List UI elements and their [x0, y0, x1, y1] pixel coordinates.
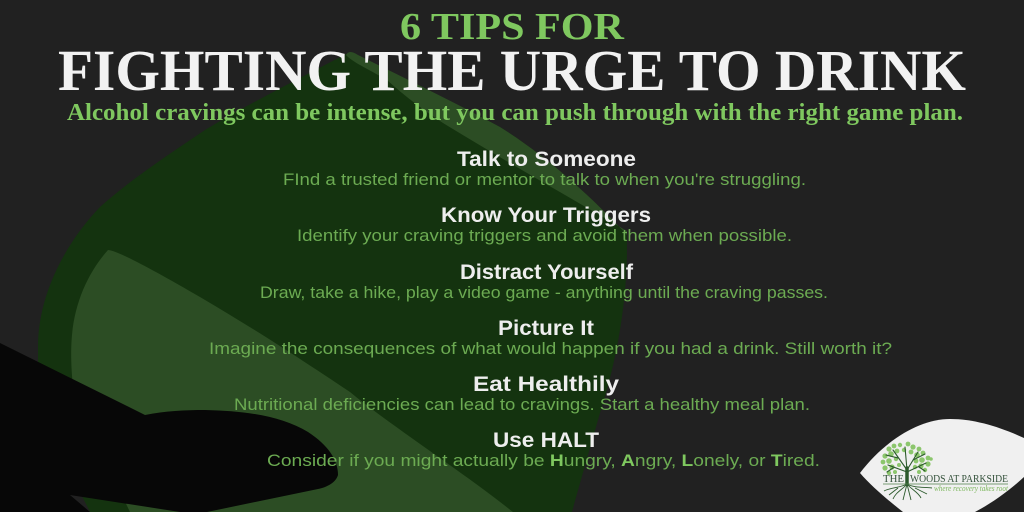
tip 5: eat healthily: Nutritional deficiencies can lead to cravings. Start a healthy meal plan.	[234, 395, 810, 414]
tip 4: picture it: Imagine the consequences of what would happen if you had a drink. Still worth it?	[209, 339, 892, 358]
logo roots	[884, 484, 932, 500]
tip 2: know your triggers	[297, 204, 792, 245]
tip 3: distract yourself	[260, 261, 828, 302]
tip 4: picture it	[209, 317, 892, 358]
logo tree trunk and branches	[886, 447, 926, 484]
title line: fighting the urge to drink: FIGHTING THE URGE TO DRINK	[58, 38, 966, 103]
subtitle: Alcohol cravings can be intense, but you can push through with the right game plan.	[67, 99, 963, 126]
logo tagline: where recovery takes root	[934, 483, 1009, 493]
background shape: light green strip along leaf edge	[346, 52, 627, 235]
tip 2: know your triggers: Identify your craving triggers and avoid them when possible.	[297, 226, 792, 245]
logo badge: white eye shape	[860, 419, 1024, 512]
logo name: THE	[883, 473, 904, 485]
title line: 6 tips for: 6 TIPS FOR	[400, 6, 625, 48]
background shape: light green leaf interior	[71, 250, 513, 512]
logo name continued: WOODS AT PARKSIDE	[910, 473, 1008, 485]
tip 1: talk to someone: Talk to Someone	[457, 148, 636, 171]
tip 1: talk to someone: FInd a trusted friend or mentor to talk to when you're struggling.	[283, 170, 806, 189]
background shape: black hand silhouette	[0, 343, 338, 512]
tip 5: eat healthily	[234, 373, 810, 414]
tip 6: use HALT: Consider if you might actually be Hungry, Angry, Lonely, or Tired.	[267, 451, 820, 470]
logo rule	[883, 483, 1008, 485]
logo: tree, wordmark and tagline	[881, 442, 1009, 500]
tip 3: distract yourself: Distract Yourself	[460, 261, 634, 284]
tip 6: use HALT: Use HALT	[493, 429, 599, 452]
tip 6: use HALT	[267, 429, 820, 470]
logo tree canopy	[881, 442, 933, 475]
tip 3: distract yourself: Draw, take a hike, play a video game - anything until the craving passes.	[260, 283, 828, 302]
tip 2: know your triggers: Know Your Triggers	[441, 204, 651, 227]
tip 4: picture it: Picture It	[498, 317, 594, 340]
background shape: dark green leaf	[38, 52, 627, 512]
tip 1: talk to someone	[283, 148, 806, 189]
tip 5: eat healthily: Eat Healthily	[473, 373, 619, 396]
